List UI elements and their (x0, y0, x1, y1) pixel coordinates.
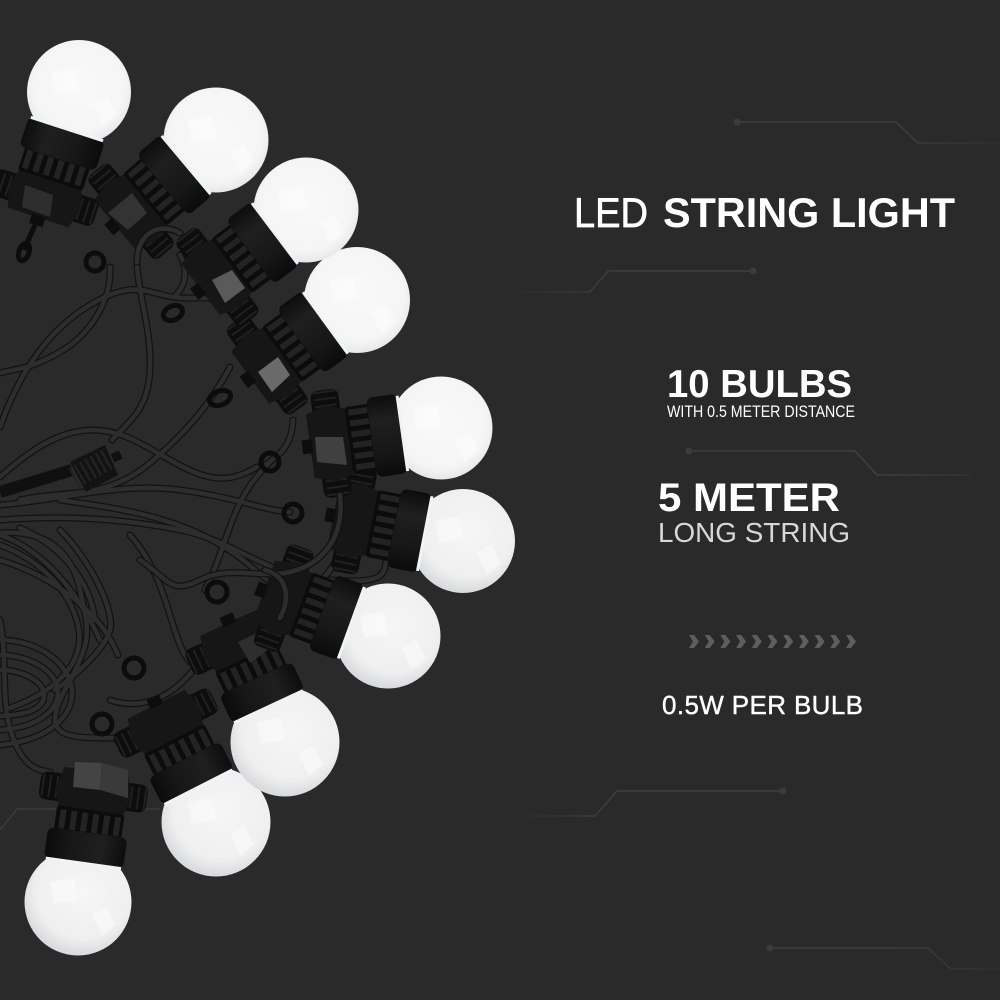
bulb 2 (74, 88, 268, 271)
overlay cable on sockets (137, 229, 341, 618)
cable hooks (16, 225, 302, 734)
spec: wattage: 0.5W PER BULB (662, 690, 863, 720)
inline cable connector (0, 445, 123, 492)
bulb 6 (315, 461, 515, 593)
bulb 3 (162, 158, 358, 337)
spec: 10 bulbs: 10 BULBS (667, 363, 852, 406)
bulb 5 (295, 376, 492, 501)
spec: 10 bulbs: WITH 0.5 METER DISTANCE (667, 402, 855, 421)
spec: 5 meter (658, 476, 850, 548)
spec: 5 meter: 5 METER (658, 476, 840, 520)
cable bundle (0, 229, 390, 772)
icon: chevron row (689, 635, 856, 648)
bulb 10 (24, 756, 151, 956)
bulb 7 (238, 537, 440, 688)
bulb 1 (0, 40, 131, 242)
bulb 8 (177, 592, 340, 796)
title: STRING LIGHT (663, 189, 955, 236)
bulb 4 (212, 247, 410, 426)
spec: 5 meter: LONG STRING (658, 517, 850, 548)
bulb 9 (104, 673, 270, 876)
title: LED (574, 189, 648, 236)
